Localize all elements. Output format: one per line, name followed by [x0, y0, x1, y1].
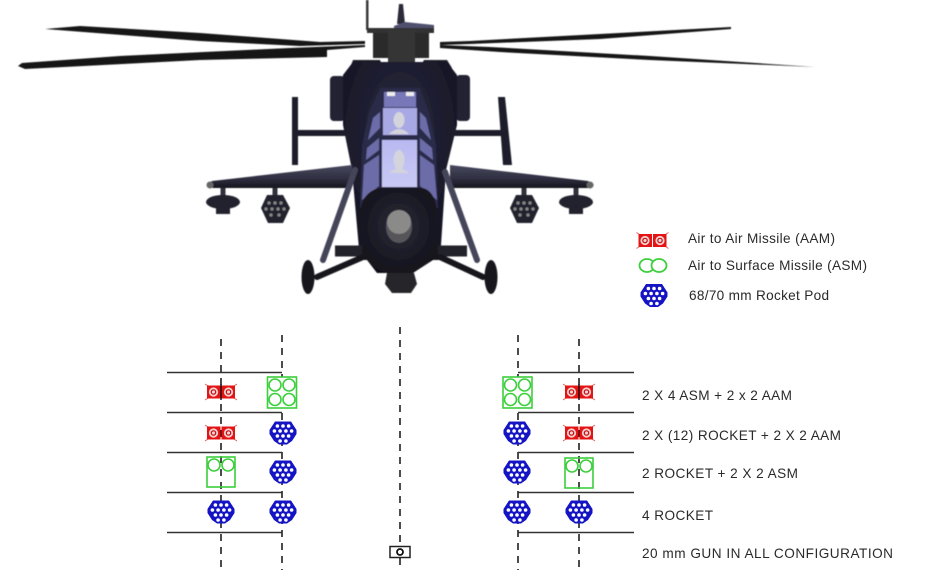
- pilot heads: [389, 112, 409, 173]
- legend label: rocket pod: 68/70 mm Rocket Pod: [689, 288, 829, 303]
- configuration labels: 2 X (12) ROCKET + 2 X 2 AAM: [642, 428, 841, 443]
- legend icon: air to air missile: [636, 232, 668, 248]
- rotor head and mast: [350, 0, 452, 68]
- configuration labels: 20 mm GUN IN ALL CONFIGURATION: [642, 546, 893, 561]
- main rotor blades: [18, 26, 815, 69]
- chin gun: [385, 273, 417, 293]
- station rows: [167, 372, 634, 532]
- helicopter illustration: [18, 0, 815, 294]
- landing gear struts: [317, 170, 483, 277]
- legend: [636, 231, 867, 307]
- engine side pods: [330, 75, 470, 121]
- configuration labels: 2 ROCKET + 2 X 2 ASM: [642, 466, 798, 481]
- row 4: 4 rocket: [208, 500, 592, 524]
- legend icon: air to surface missile: [640, 259, 666, 272]
- landing wheels: [302, 260, 498, 294]
- wings: [206, 165, 594, 188]
- row 1: 2 X 4 ASM + 2 x 2 AAM: [205, 377, 595, 408]
- gun station: [390, 546, 410, 565]
- row 2: 2 X 12 rocket + 2 x 2 AAM: [205, 422, 595, 444]
- legend label: ASM: Air to Surface Missile (ASM): [688, 258, 867, 273]
- loadout diagram: [167, 327, 893, 570]
- legend label: AAM: Air to Air Missile (AAM): [688, 231, 835, 246]
- legend icon: rocket pod: [640, 284, 668, 307]
- configuration labels: 4 ROCKET: [642, 508, 713, 523]
- configuration labels: [642, 388, 893, 561]
- stub fins: [292, 97, 512, 165]
- pylon centre lines: [221, 327, 579, 570]
- configuration labels: 2 X 4 ASM + 2 x 2 AAM: [642, 388, 792, 403]
- upper fuselage: [343, 62, 457, 260]
- canopy: [360, 88, 438, 208]
- row 3: 2 rocket + 2 x 2 ASM: [207, 457, 593, 488]
- nose and sensor turret: [360, 188, 437, 273]
- wing-mounted pods: [206, 188, 593, 223]
